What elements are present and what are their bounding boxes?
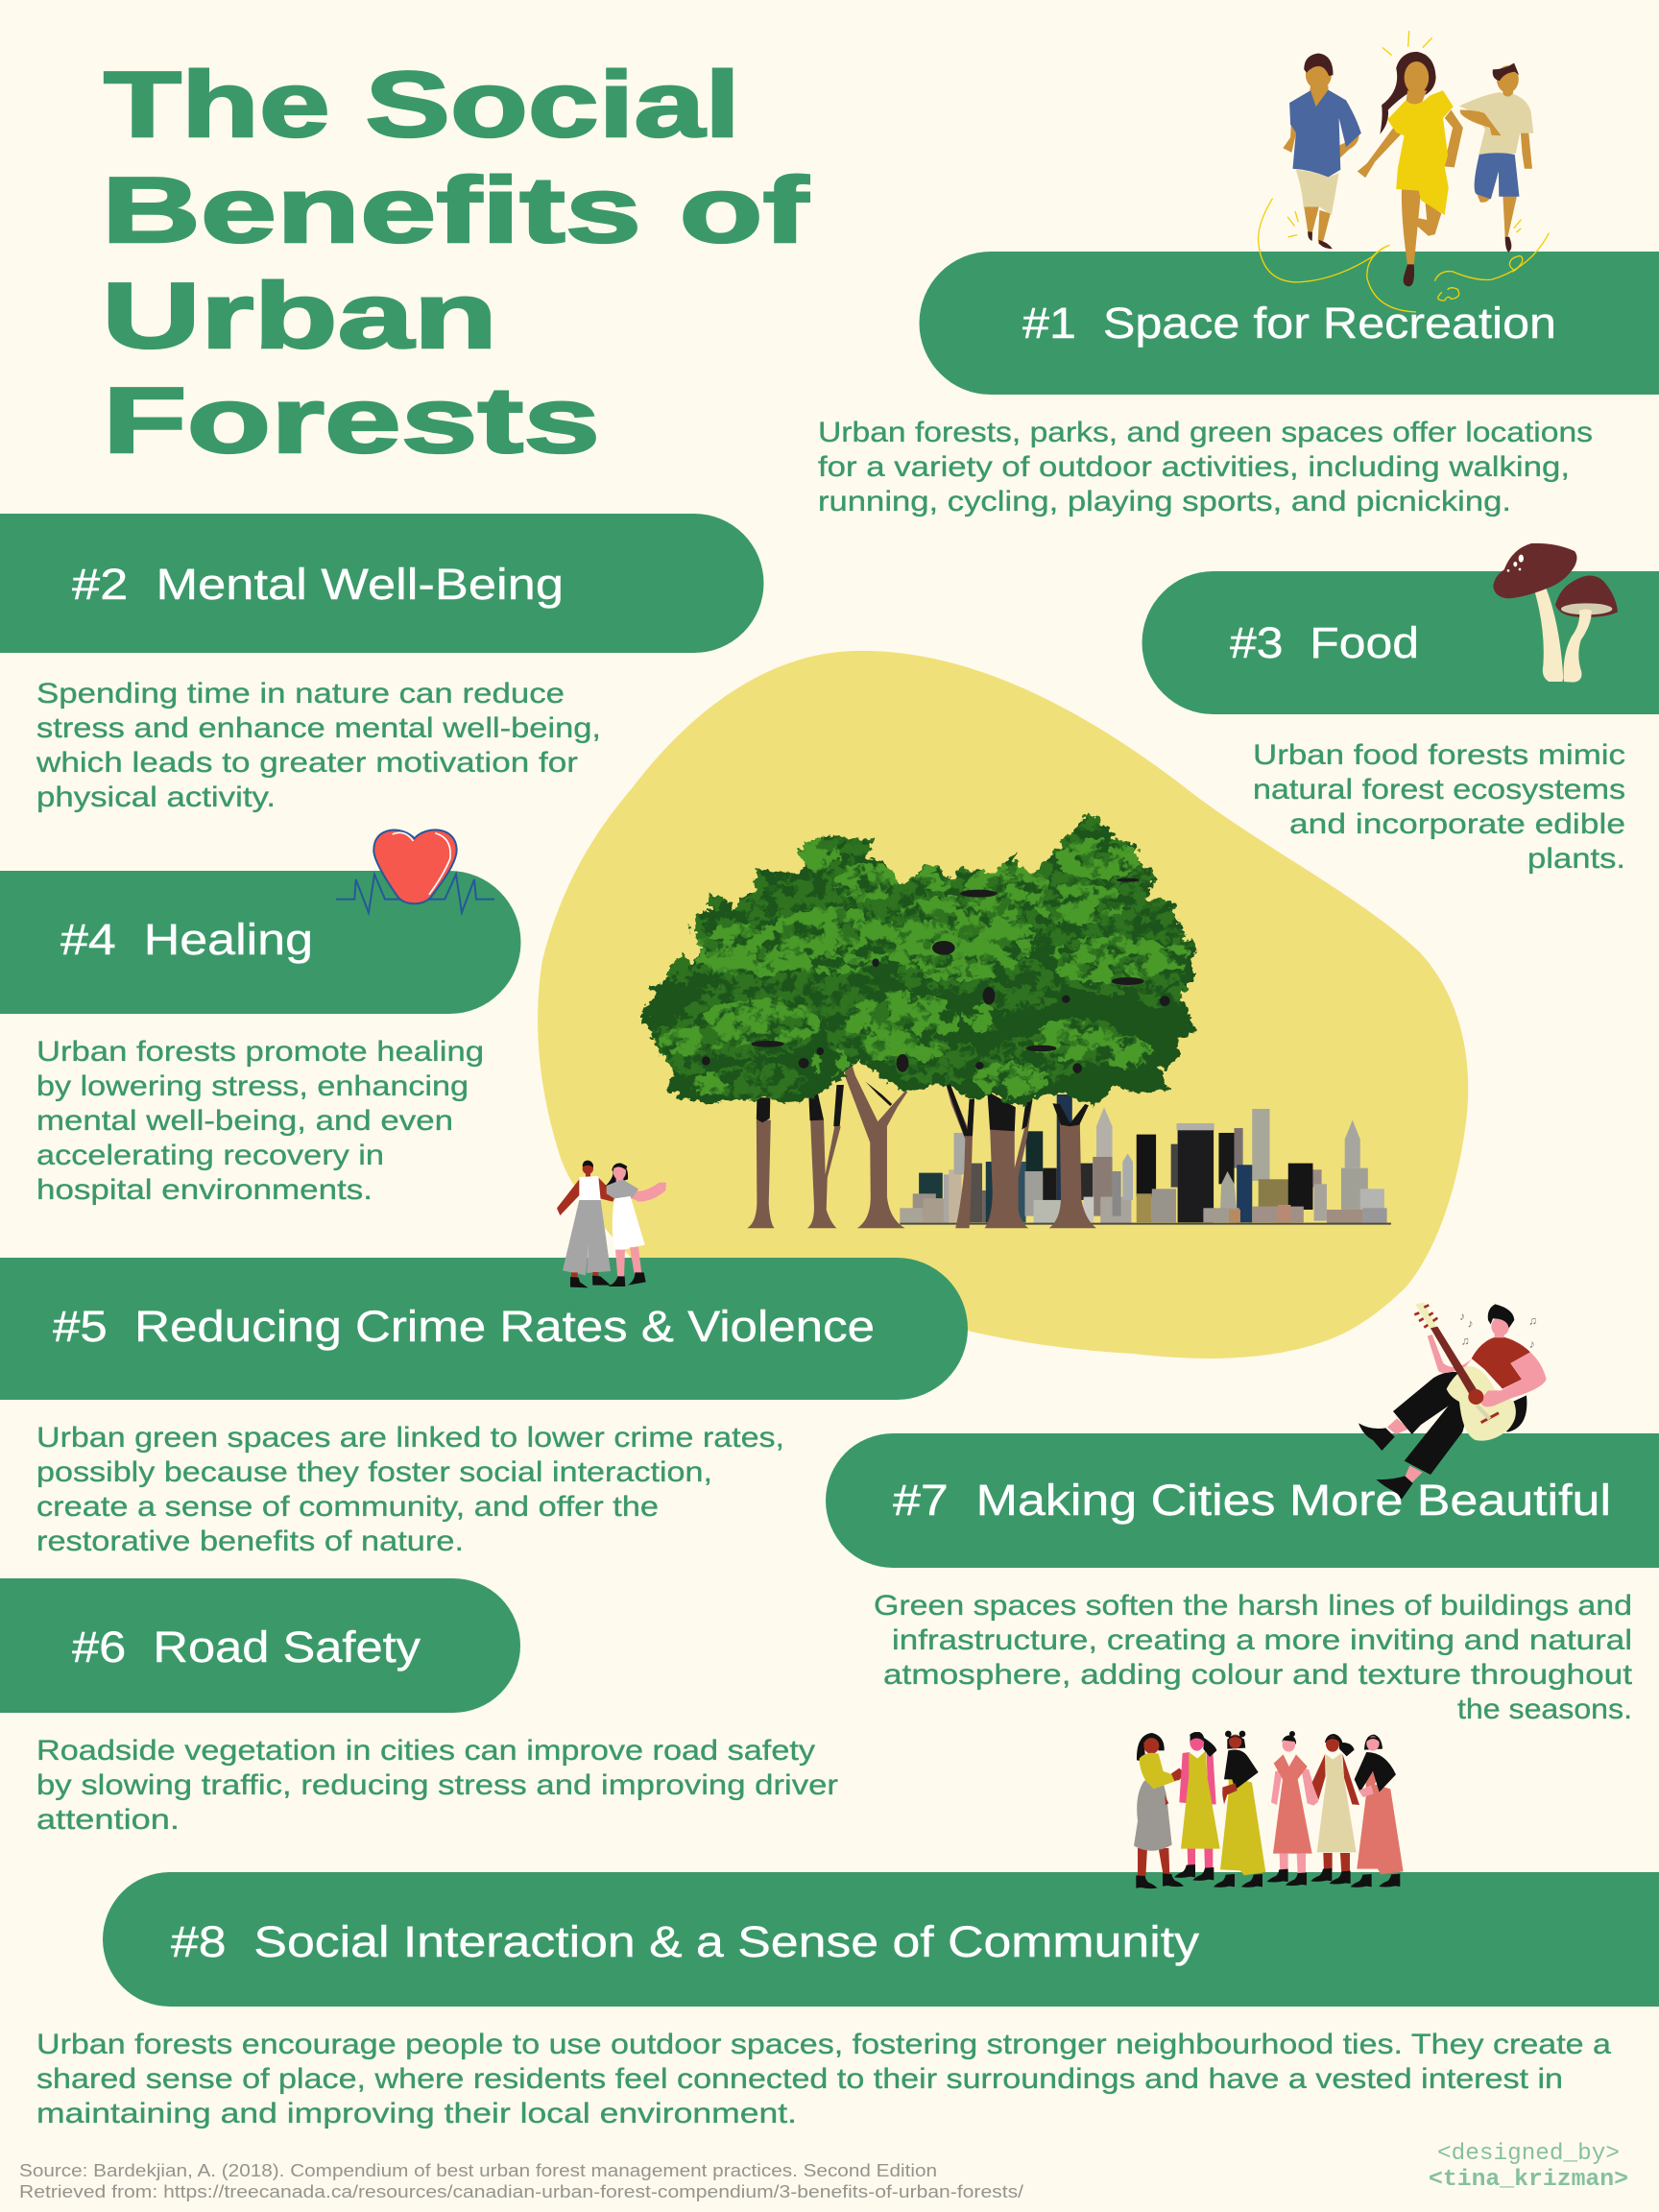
body text: the seasons. (1457, 1694, 1632, 1725)
body text: Roadside vegetation in cities can improve road safety (36, 1735, 815, 1767)
heading: #7 Making Cities More Beautiful (893, 1476, 1611, 1525)
title: The Social (104, 52, 740, 156)
title (102, 52, 809, 472)
title: Forests (103, 368, 600, 472)
dark gaps in foliage (702, 878, 1170, 1073)
woman 5 (1310, 1734, 1359, 1885)
body text: mental well-being, and even (36, 1105, 453, 1137)
illustration: trees and city skyline (635, 806, 1391, 1228)
body text: Urban forests promote healing (36, 1036, 484, 1068)
heading: #6 Road Safety (72, 1623, 421, 1671)
body text (818, 417, 1593, 517)
icon: heart with pulse line (336, 830, 494, 913)
yellow background blob (538, 651, 1468, 1358)
body text: which leads to greater motivation for (36, 747, 578, 779)
body text: Spending time in nature can reduce (36, 678, 565, 709)
panel: #3 Food (1142, 543, 1659, 875)
illustration: couple walking (557, 1161, 666, 1287)
pill banner (103, 1872, 1659, 2007)
designer credit: <designed_by> (1437, 2141, 1620, 2167)
body text: natural forest ecosystems (1253, 774, 1625, 805)
body text: maintaining and improving their local environment. (36, 2098, 797, 2129)
body text: possibly because they foster social interaction, (36, 1456, 712, 1488)
pill banner (920, 252, 1659, 395)
panel: #1 Space for Recreation (818, 32, 1659, 517)
body text (36, 1735, 838, 1836)
body text (1253, 739, 1625, 875)
tree trunks (747, 1056, 1096, 1228)
designer credit: <tina_krizman> (1429, 2167, 1628, 2193)
body text: Green spaces soften the harsh lines of buildings and (874, 1590, 1632, 1622)
woman 1 (1134, 1733, 1185, 1888)
heading: #2 Mental Well-Being (72, 560, 564, 609)
body text (874, 1590, 1633, 1725)
body text: shared sense of place, where residents feel connected to their surroundings and have a vested interest in (36, 2063, 1563, 2095)
source citation: Retrieved from: https://treecanada.ca/resources/canadian-urban-forest-compendium/3-benefits-of-urban-forests/ (19, 2182, 1023, 2201)
pill banner (0, 514, 764, 653)
body text: Urban food forests mimic (1253, 739, 1625, 771)
source citation: Source: Bardekjian, A. (2018). Compendium of best urban forest management practices. Second Edition (19, 2161, 937, 2180)
body text: Urban forests, parks, and green spaces offer locations (818, 417, 1593, 448)
illustration: guitar player: ♫ (1461, 1334, 1470, 1348)
illustration: guitar player: ♪ (1529, 1337, 1535, 1351)
heading: #1 Space for Recreation (1022, 299, 1556, 348)
panel: #7 Making Cities More Beautiful (826, 1303, 1659, 1725)
body text: physical activity. (36, 781, 276, 813)
tree canopy foliage (635, 806, 1206, 1111)
panel: #5 Reducing Crime Rates & Violence (0, 1161, 968, 1557)
body text: Urban forests encourage people to use outdoor spaces, fostering stronger neighbourhood ties. They create a (36, 2029, 1611, 2060)
body text (36, 678, 601, 813)
body text (36, 1036, 484, 1206)
body text (36, 1422, 784, 1557)
pill banner (826, 1433, 1659, 1568)
icon: mushrooms (1493, 543, 1618, 683)
body text: atmosphere, adding colour and texture throughout (883, 1659, 1633, 1691)
illustration: three people running (1259, 32, 1549, 312)
body text: create a sense of community, and offer the (36, 1491, 659, 1523)
panel: #2 Mental Well-Being (0, 514, 764, 813)
city skyline (900, 1094, 1391, 1225)
title: Benefits of (102, 157, 809, 262)
body text: restorative benefits of nature. (36, 1526, 464, 1557)
illustration: group of six women (1134, 1731, 1404, 1888)
body text: Urban green spaces are linked to lower crime rates, (36, 1422, 784, 1454)
pill banner (0, 1258, 968, 1400)
body text: infrastructure, creating a more inviting and natural (892, 1624, 1632, 1656)
woman 3 (1214, 1731, 1265, 1887)
pill banner (1142, 571, 1659, 714)
woman 6 (1351, 1735, 1404, 1887)
heading: #3 Food (1230, 618, 1419, 667)
pill banner (0, 1578, 520, 1713)
source citation (19, 2161, 1023, 2201)
body text: plants. (1527, 843, 1625, 875)
body text: for a variety of outdoor activities, including walking, (818, 451, 1570, 483)
panel: #4 Healing (0, 830, 520, 1206)
heading: #4 Healing (60, 915, 313, 964)
body text: attention. (36, 1804, 180, 1836)
panel: #8 Social Interaction & a Sense of Community (36, 1731, 1659, 2129)
body text: by lowering stress, enhancing (36, 1070, 469, 1102)
panel: #6 Road Safety (0, 1578, 838, 1836)
illustration: guitar player: ♪ (1467, 1317, 1473, 1331)
pill banner (0, 871, 520, 1014)
body text: running, cycling, playing sports, and picnicking. (818, 486, 1511, 517)
illustration: guitar player: ♪ (1459, 1310, 1465, 1323)
body text: and incorporate edible (1289, 808, 1625, 840)
heading: #8 Social Interaction & a Sense of Community (171, 1917, 1200, 1966)
illustration: guitar player (1358, 1303, 1547, 1500)
woman 4 (1267, 1731, 1318, 1886)
heading: #5 Reducing Crime Rates & Violence (53, 1302, 875, 1351)
body text: hospital environments. (36, 1174, 373, 1206)
body text: by slowing traffic, reducing stress and improving driver (36, 1769, 838, 1801)
woman 2 (1174, 1732, 1220, 1881)
body text (36, 2029, 1611, 2129)
illustration: guitar player: ♫ (1528, 1313, 1537, 1327)
designer credit (1429, 2141, 1628, 2193)
body text: stress and enhance mental well-being, (36, 712, 601, 744)
title: Urban (102, 263, 497, 368)
body text: accelerating recovery in (36, 1140, 384, 1171)
